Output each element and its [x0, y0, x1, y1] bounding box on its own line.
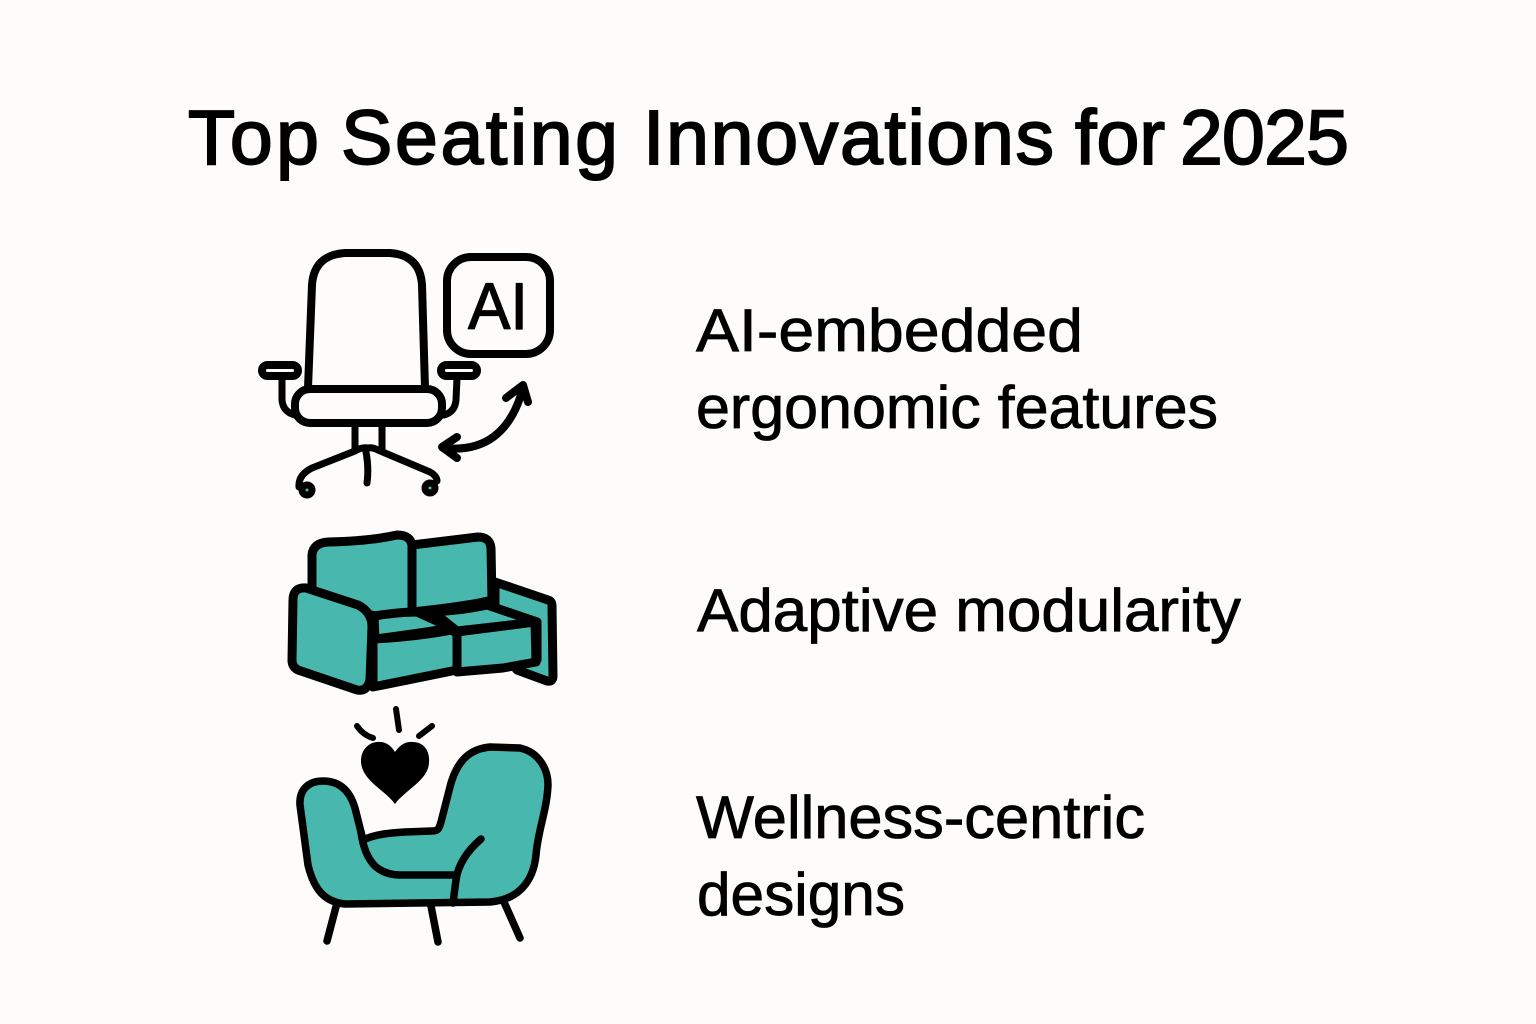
label: AI-embedded ergonomic features: [696, 297, 1218, 441]
chair base and casters: [299, 425, 437, 495]
chair seat: [295, 389, 442, 423]
label: AI-embedded ergonomic features: AI-embedded: [696, 297, 1083, 364]
title: Top: [188, 95, 319, 181]
AI badge: [447, 257, 550, 354]
sofa back cushions: [312, 535, 412, 616]
icon: office chair with AI badge: [262, 253, 550, 495]
label: AI-embedded ergonomic features: ergonomic features: [696, 374, 1218, 441]
left armrest: [262, 365, 298, 415]
icon: modular sofa: [292, 535, 553, 690]
title: for: [1075, 95, 1165, 181]
front arm: [292, 588, 372, 690]
title: Innovations: [643, 95, 1054, 181]
seat cushions: [374, 612, 452, 639]
chair backrest: [308, 253, 425, 388]
label: Wellness-centric designs: Wellness-centric: [696, 784, 1145, 851]
right armrest: [441, 365, 477, 415]
label: Adaptive modularity: Adaptive modularity: [697, 577, 1241, 644]
seat fronts: [373, 630, 457, 687]
armchair legs: [327, 902, 520, 942]
armchair inner arm line: [361, 832, 481, 903]
double-headed arrow: [442, 385, 528, 458]
title: Seating: [341, 95, 618, 181]
far side panel: [495, 582, 553, 681]
heart: [361, 742, 429, 804]
inner side edge: [487, 605, 537, 660]
armchair body: [300, 747, 548, 904]
label: Wellness-centric designs: designs: [697, 861, 905, 928]
heart sparks: [357, 709, 432, 738]
icon: wellness armchair with heart: [300, 709, 548, 942]
label: Wellness-centric designs: [696, 784, 1145, 928]
title: 2025: [1180, 95, 1349, 181]
AI badge: AI: [468, 269, 528, 343]
